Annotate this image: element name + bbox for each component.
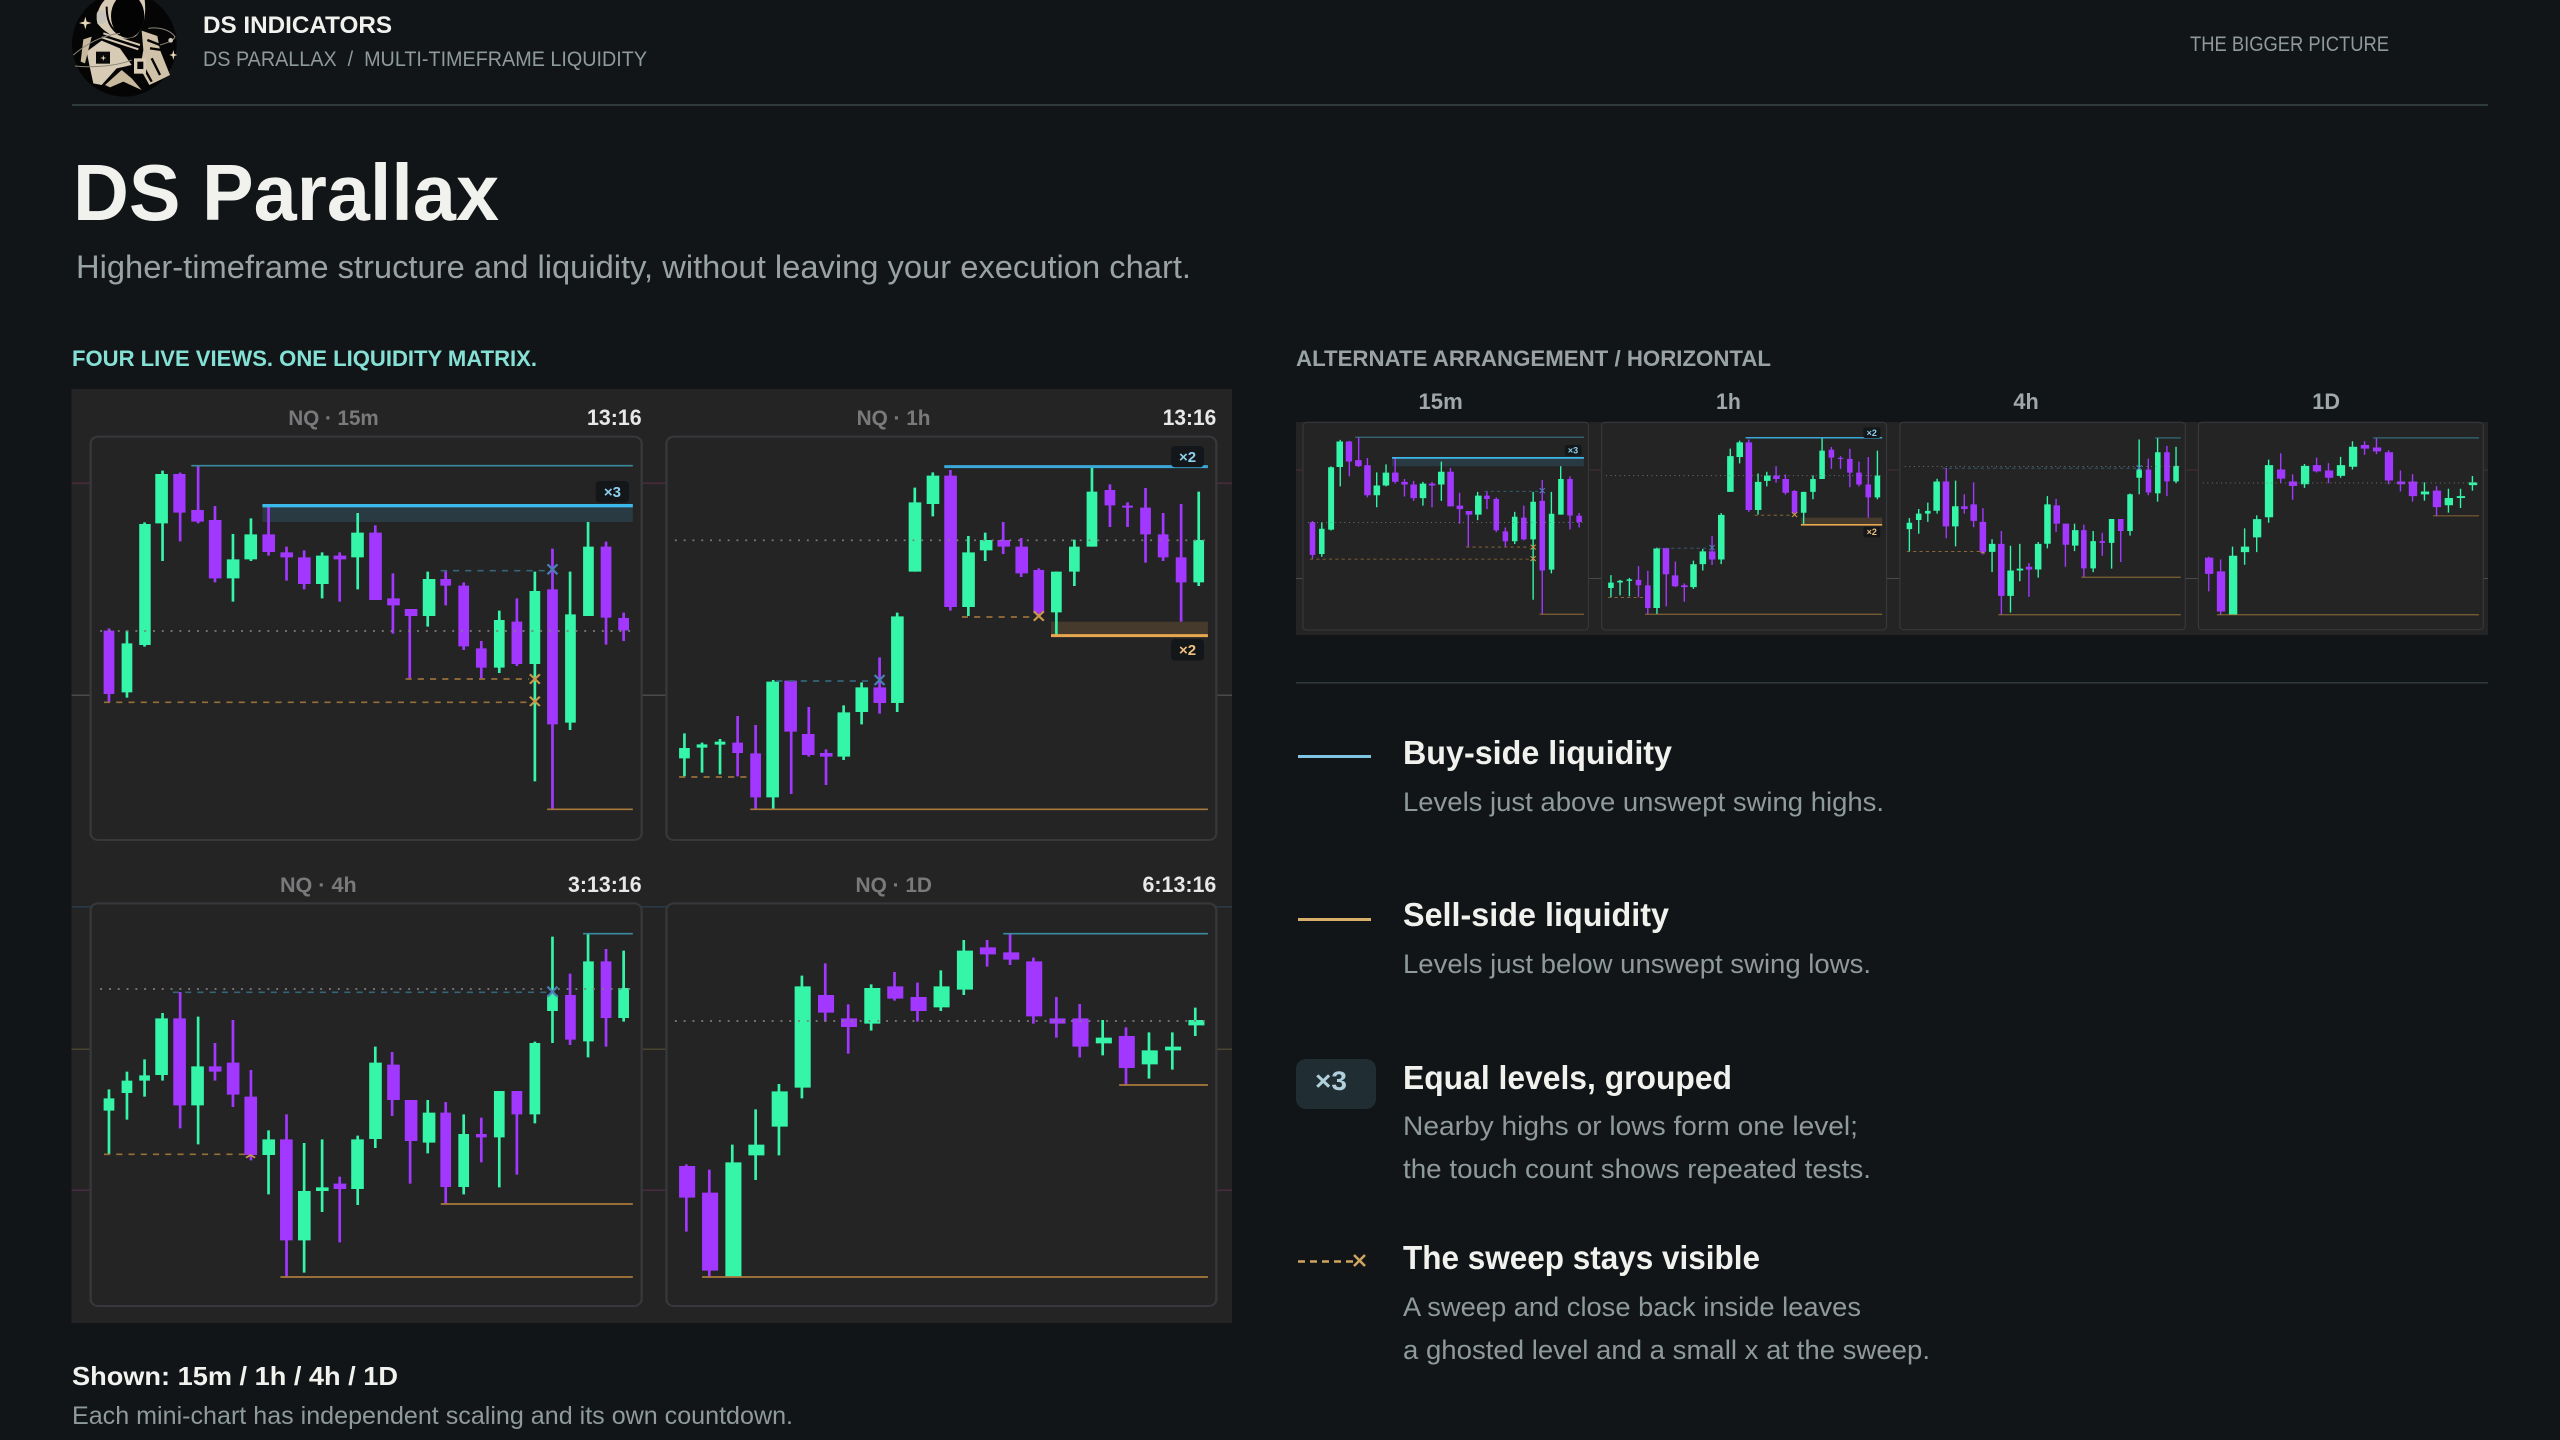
chart: NQ 1D: 6:13:16 xyxy=(1142,872,1216,897)
legend: sweep: a ghosted level and a small x at the sweep. xyxy=(1403,1335,1930,1365)
legend: sell-side liquidity: Sell-side liquidity xyxy=(1403,896,1670,933)
title: DS Parallax xyxy=(73,148,499,237)
chart: NQ 15m: 13:16 xyxy=(587,405,642,430)
text: shown timeframes: Shown: 15m / 1h / 4h / 1D xyxy=(72,1361,398,1391)
panel: horizontal arrangement: 1D xyxy=(2312,389,2340,414)
panel: horizontal arrangement: 1h xyxy=(1716,389,1741,414)
chart: NQ 1h: ×2 xyxy=(1179,642,1196,659)
mini chart: 1h: ×2 xyxy=(1867,428,1877,438)
legend: equal levels: Nearby highs or lows form one level; xyxy=(1403,1111,1858,1141)
brand name: DS INDICATORS xyxy=(203,12,392,39)
header: brand xyxy=(72,0,647,97)
legend: buy-side liquidity: Buy-side liquidity xyxy=(1403,734,1673,771)
panel: horizontal arrangement: 15m xyxy=(1418,389,1463,414)
chart: NQ 1D xyxy=(666,872,1216,1306)
panel: horizontal arrangement xyxy=(1296,389,2488,635)
panel: liquidity matrix xyxy=(72,389,1232,1323)
chart: NQ 1h xyxy=(666,405,1216,840)
heading: alternate arrangement: ALTERNATE ARRANGEMENT / HORIZONTAL xyxy=(1296,346,1771,371)
mini chart: 15m xyxy=(1303,422,1588,630)
mini chart: 1h: ×2 xyxy=(1867,527,1877,537)
legend: equal levels: ×3 xyxy=(1315,1066,1347,1096)
chart: NQ 1h: NQ · 1h xyxy=(857,407,930,430)
legend: sell-side liquidity xyxy=(1298,896,1871,979)
section label: the bigger picture: THE BIGGER PICTURE xyxy=(2190,33,2389,56)
legend: buy-side liquidity: Levels just above unswept swing highs. xyxy=(1403,787,1884,817)
mini chart: 4h xyxy=(1900,422,2185,630)
subtitle: Higher-timeframe structure and liquidity, without leaving your execution chart. xyxy=(76,249,1191,285)
chart: NQ 15m: NQ · 15m xyxy=(288,407,379,430)
panel: horizontal arrangement: 4h xyxy=(2013,389,2039,414)
legend: buy-side liquidity xyxy=(1298,734,1884,817)
chart: NQ 1D: NQ · 1D xyxy=(856,874,932,897)
mini chart: 1D xyxy=(2198,422,2483,630)
chart: NQ 15m: ×3 xyxy=(604,484,621,501)
text: scaling note: Each mini-chart has independent scaling and its own countdown. xyxy=(72,1402,793,1430)
legend: equal levels: Equal levels, grouped xyxy=(1403,1059,1732,1096)
chart: NQ 15m xyxy=(91,405,642,840)
legend: sweep: The sweep stays visible xyxy=(1403,1239,1760,1276)
breadcrumb: DS PARALLAX / MULTI-TIMEFRAME LIQUIDITY xyxy=(203,48,647,71)
chart: NQ 4h: 3:13:16 xyxy=(568,872,642,897)
mini chart: 1h xyxy=(1602,422,1887,630)
chart: NQ 1h: 13:16 xyxy=(1163,405,1216,430)
chart: NQ 4h xyxy=(91,872,642,1306)
legend: sell-side liquidity: Levels just below unswept swing lows. xyxy=(1403,949,1871,979)
legend: sweep: A sweep and close back inside leaves xyxy=(1403,1292,1861,1322)
heading: four live views: FOUR LIVE VIEWS. ONE LIQUIDITY MATRIX. xyxy=(72,346,537,371)
legend: equal levels xyxy=(1296,1059,1871,1184)
icon: astronaut logo xyxy=(72,0,177,97)
chart: NQ 4h: NQ · 4h xyxy=(280,874,357,897)
mini chart: 15m: ×3 xyxy=(1568,446,1578,456)
legend: equal levels: the touch count shows repeated tests. xyxy=(1403,1154,1871,1184)
legend: sweep xyxy=(1298,1239,1930,1365)
chart: NQ 1h: ×2 xyxy=(1179,449,1196,466)
